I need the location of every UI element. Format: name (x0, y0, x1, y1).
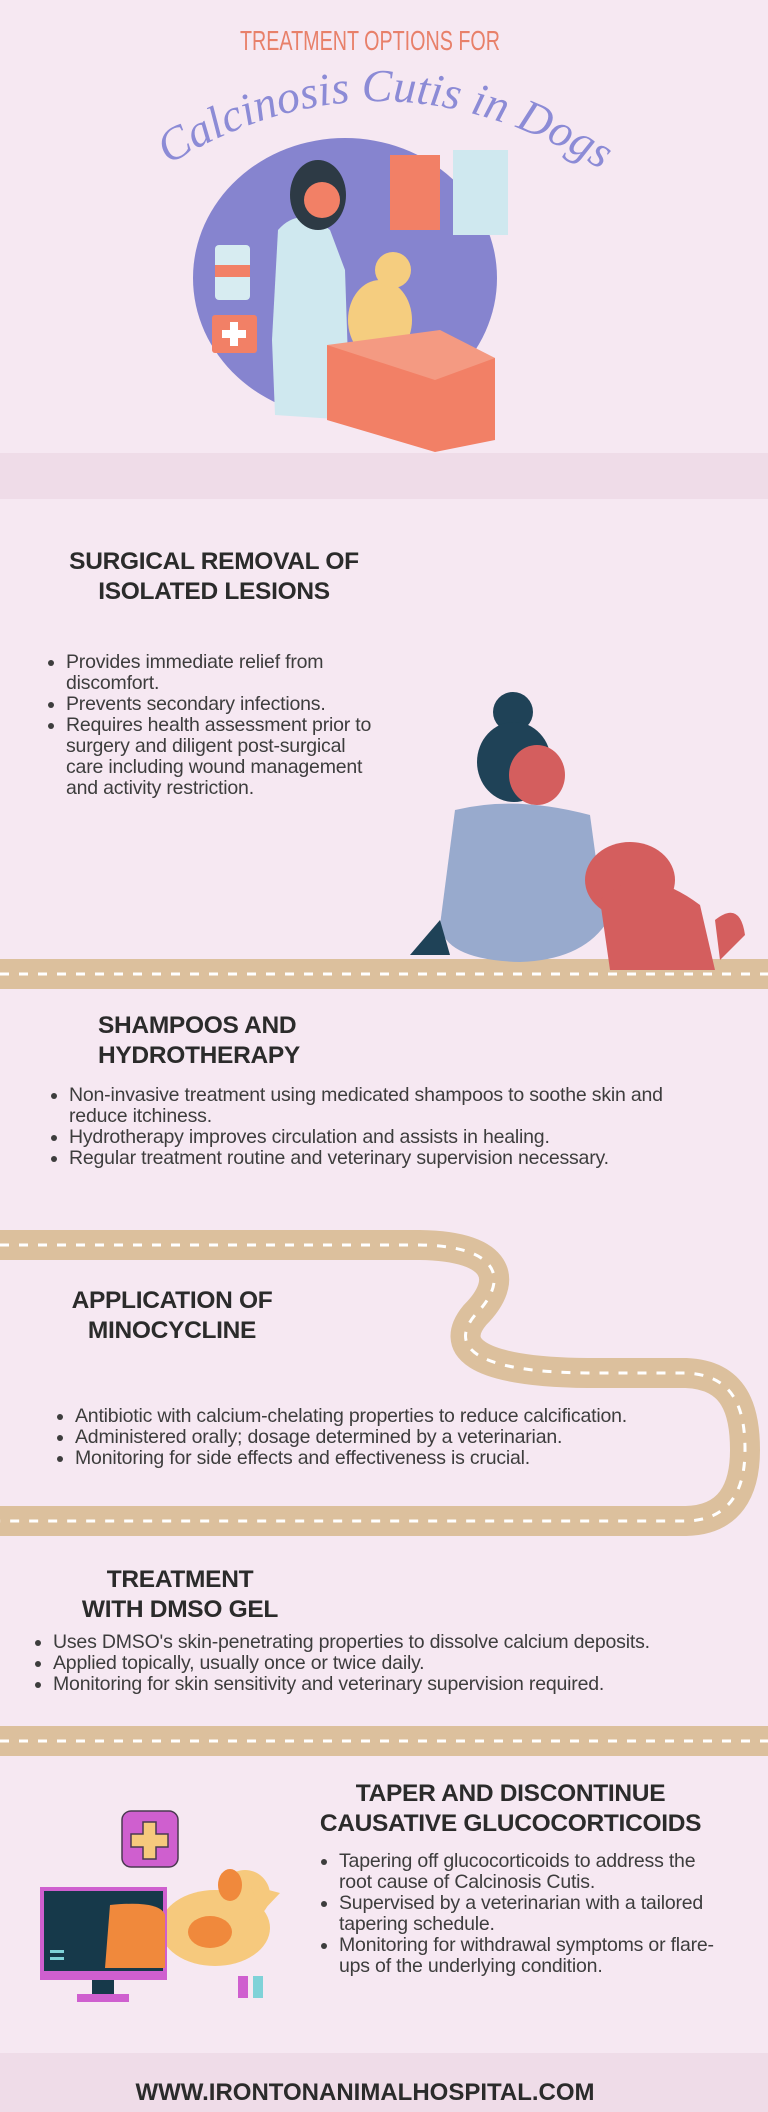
heading: surgical removal: ISOLATED LESIONS (98, 578, 330, 605)
heading: minocycline (72, 1287, 272, 1344)
heading: surgical removal: SURGICAL REMOVAL OF (69, 548, 359, 575)
bullets: taper: Monitoring for withdrawal symptoms or flare- (339, 1934, 714, 1956)
bullets: dmso: Monitoring for skin sensitivity and veterinary supervision required. (53, 1673, 604, 1695)
heading: dmso (82, 1566, 278, 1623)
bullets: minocycline (57, 1405, 627, 1469)
heading: shampoos: HYDROTHERAPY (98, 1042, 300, 1069)
bullets: surgical removal (48, 651, 371, 799)
bullets: shampoos: Regular treatment routine and veterinary supervision necessary. (69, 1147, 609, 1169)
illustration: nurse with red dog (410, 692, 745, 970)
bullets: taper (321, 1850, 714, 1977)
bullets: surgical removal: Provides immediate relief from (66, 651, 323, 673)
bullets: minocycline: Monitoring for side effects and effectiveness is crucial. (75, 1447, 530, 1469)
bullets: dmso (35, 1631, 650, 1695)
subtitle: treatment options for: TREATMENT OPTIONS FOR (240, 25, 500, 56)
bullets: minocycline: Administered orally; dosage determined by a veterinarian. (75, 1426, 562, 1448)
bullets: taper: Supervised by a veterinarian with a tailored (339, 1892, 703, 1914)
bullets: surgical removal: Prevents secondary infections. (66, 693, 326, 715)
hero illustration: vet with dog (193, 138, 508, 452)
bullets: minocycline: Antibiotic with calcium-chelating properties to reduce calcification. (75, 1405, 627, 1427)
bullets: surgical removal: and activity restriction. (66, 777, 254, 799)
bullets: dmso: Uses DMSO's skin-penetrating properties to dissolve calcium deposits. (53, 1631, 650, 1653)
bullets: taper: root cause of Calcinosis Cutis. (339, 1871, 595, 1893)
bullets: shampoos (51, 1084, 663, 1169)
bullets: taper: ups of the underlying condition. (339, 1955, 603, 1977)
bullets: shampoos: Hydrotherapy improves circulation and assists in healing. (69, 1126, 550, 1148)
footer url: WWW.IRONTONANIMALHOSPITAL.COM (135, 2079, 595, 2106)
bullets: taper: Tapering off glucocorticoids to address the (339, 1850, 695, 1872)
heading: taper glucocorticoids: CAUSATIVE GLUCOCORTICOIDS (320, 1810, 701, 1837)
heading: minocycline: MINOCYCLINE (88, 1317, 256, 1344)
bullets: surgical removal: surgery and diligent post-surgical (66, 735, 345, 757)
heading: minocycline: APPLICATION OF (72, 1287, 272, 1314)
heading: dmso: TREATMENT (107, 1566, 253, 1593)
bullets: dmso: Applied topically, usually once or twice daily. (53, 1652, 424, 1674)
heading: shampoos: SHAMPOOS AND (98, 1012, 296, 1039)
bullets: surgical removal: discomfort. (66, 672, 159, 694)
script title: Calcinosis Cutis in Dogs (162, 70, 611, 166)
title (162, 25, 611, 166)
bullets: shampoos: reduce itchiness. (69, 1105, 212, 1127)
heading: dmso: WITH DMSO GEL (82, 1596, 278, 1623)
heading: shampoos (98, 1012, 300, 1069)
bullets: surgical removal: Requires health assessment prior to (66, 714, 371, 736)
bullets: shampoos: Non-invasive treatment using medicated shampoos to soothe skin and (69, 1084, 663, 1106)
illustration: dog x-ray monitor (40, 1810, 280, 2002)
bullets: surgical removal: care including wound management (66, 756, 362, 778)
heading: taper glucocorticoids (320, 1780, 701, 1837)
heading: surgical removal (69, 548, 359, 605)
bullets: taper: tapering schedule. (339, 1913, 495, 1935)
heading: taper glucocorticoids: TAPER AND DISCONTINUE (356, 1780, 665, 1807)
